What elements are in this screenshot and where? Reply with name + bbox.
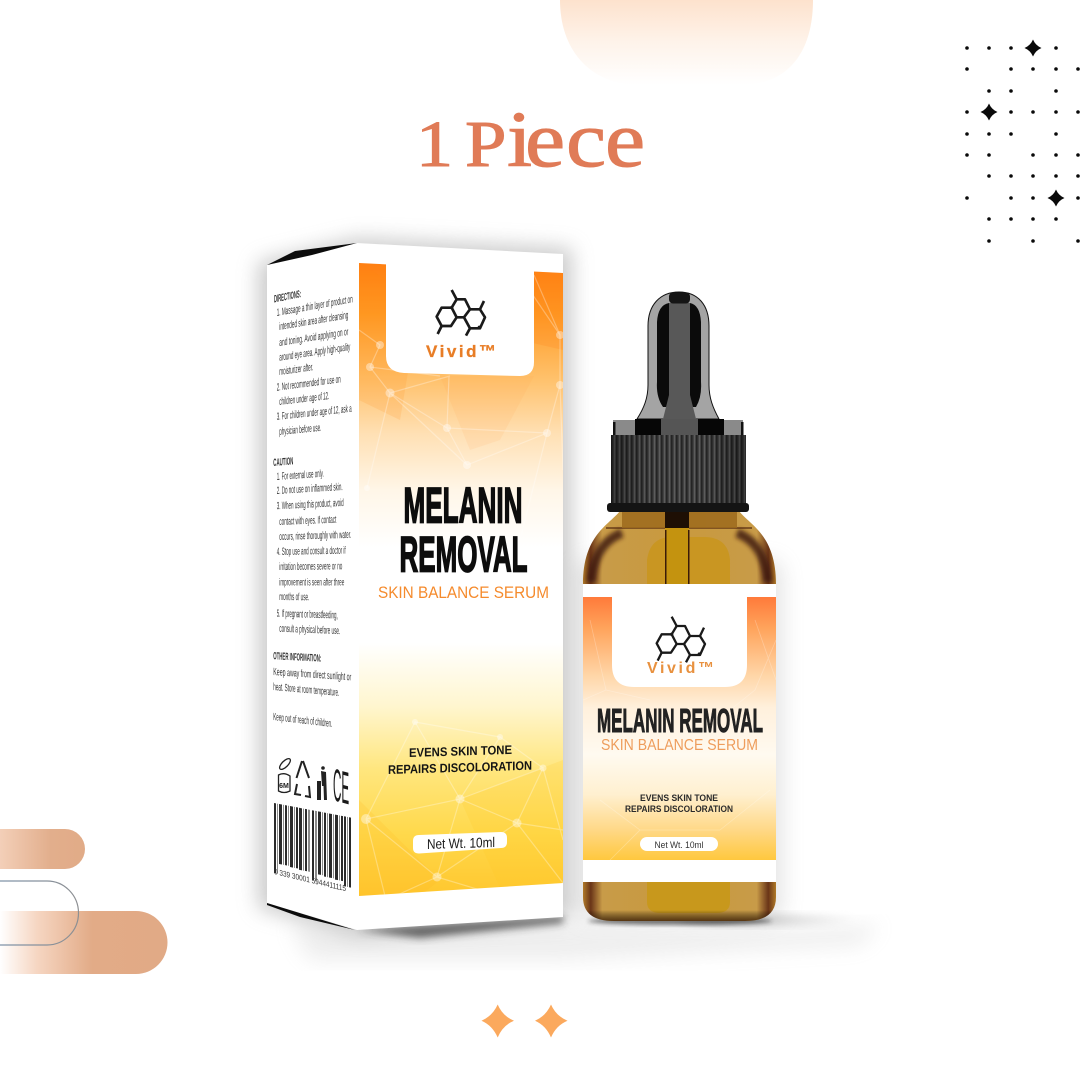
net weight pill on box: Net Wt. 10ml <box>427 834 495 852</box>
cap rim <box>607 503 749 512</box>
box front artwork <box>359 260 564 900</box>
benefits on box: EVENS SKIN TONE <box>409 743 512 760</box>
box side caution text: 5. If pregnant or breastfeeding, <box>277 608 338 622</box>
box side other information text: Keep out of reach of children. <box>273 711 332 730</box>
product box: 4. Stop use and consult a doctor if <box>277 545 346 558</box>
box side caution text: contact with eyes. If contact <box>279 514 336 528</box>
decorative dot grid with sparkles <box>965 40 1080 243</box>
box side caution text <box>273 455 351 637</box>
product box: 1. Massage a thin layer of product on <box>277 293 353 319</box>
product box: 2. Do not use on inflammed skin. <box>277 481 343 497</box>
decorative left pills <box>0 829 168 974</box>
ribbed cap <box>611 435 746 504</box>
box bottom black edge <box>267 903 355 930</box>
amber glass shoulder <box>583 511 776 584</box>
box side other information text: OTHER INFORMATION: <box>273 650 321 665</box>
inner liquid arch <box>647 537 730 584</box>
product name on bottle: MELANIN REMOVAL <box>597 702 763 739</box>
serum bottle <box>583 292 776 921</box>
box side directions text: moisturizer after. <box>279 361 313 378</box>
box side directions text: DIRECTIONS: <box>274 288 301 305</box>
shoulder line <box>606 527 752 529</box>
product box <box>267 243 564 930</box>
product box: 3. For children under age of 12, ask a <box>277 403 352 423</box>
bottle label logo tab <box>612 590 747 687</box>
box side directions text: physician before use. <box>279 422 321 438</box>
box side directions text <box>274 288 353 438</box>
icon: CE mark: CE <box>333 760 349 815</box>
box white logo tab <box>386 255 534 376</box>
bottle label white band <box>583 584 776 882</box>
brand name on bottle: Vivid™ <box>647 660 714 677</box>
neck amber <box>622 512 737 528</box>
product shadows <box>258 238 880 960</box>
benefits on bottle <box>625 793 733 815</box>
icon: tidy man <box>317 766 327 800</box>
box side caution text: consult a physical before use. <box>279 623 340 637</box>
subtitle on bottle: SKIN BALANCE SERUM <box>601 737 758 754</box>
box side caution text: CAUTION <box>273 455 293 469</box>
shoulder dark reflections <box>591 533 768 582</box>
icon: open jar <box>278 757 292 792</box>
subtitle on box: SKIN BALANCE SERUM <box>378 583 549 602</box>
collar band <box>613 419 744 436</box>
net weight pill on bottle <box>640 837 718 851</box>
box side caution text: months of use. <box>279 591 309 603</box>
product name on box: MELANIN <box>404 478 522 534</box>
amber glass base <box>583 882 776 921</box>
box top black edge <box>267 243 357 265</box>
product box: 3. When using this product, avoid <box>277 497 344 512</box>
bottom sparkle stars <box>482 1004 568 1038</box>
product name on box <box>400 478 528 582</box>
product box: around eye area. Apply high-quality <box>279 341 351 364</box>
product box: occurs, rinse thoroughly with water. <box>279 529 351 543</box>
product box: improvement is seen after three <box>279 577 344 589</box>
box side other information text: heat. Store at room temperature. <box>273 681 339 699</box>
icon: recycling triangle <box>295 761 310 797</box>
brand name on box: Vivid™ <box>426 342 496 361</box>
dropper bulb <box>637 292 719 419</box>
box side other information text: Keep away from direct sunlight or <box>273 666 352 683</box>
benefits on box <box>388 743 532 777</box>
box side directions text: children under age of 12. <box>279 390 329 408</box>
icon: molecule logo on box <box>437 290 485 336</box>
benefits on bottle: EVENS SKIN TONE <box>640 793 718 804</box>
top peach rounded shape <box>560 0 813 85</box>
box side other information text <box>273 650 352 730</box>
benefits on box: REPAIRS DISCOLORATION <box>388 759 532 777</box>
product box: and toning. Avoid applying on or <box>279 326 349 349</box>
title: 1 Piece <box>416 96 645 184</box>
icon: molecule logo on bottle <box>657 617 705 662</box>
bottle label artwork <box>583 597 776 860</box>
barcode <box>274 803 351 888</box>
icon: open jar: 6M <box>279 783 289 790</box>
box side caution text: 1. For external use only. <box>277 468 324 483</box>
product box: irritation becomes severe or no <box>279 560 342 573</box>
benefits on bottle: REPAIRS DISCOLORATION <box>625 804 733 815</box>
barcode digits: 0 339 30001 5944411115 <box>274 867 346 893</box>
dropper tube <box>665 512 690 584</box>
product name on box: REMOVAL <box>400 526 528 582</box>
box side directions text: 2. Not recommended for use on <box>277 373 341 394</box>
box body <box>267 243 563 930</box>
product box: intended skin area after cleansing <box>279 309 348 333</box>
net weight pill on bottle: Net Wt. 10ml <box>654 840 704 851</box>
